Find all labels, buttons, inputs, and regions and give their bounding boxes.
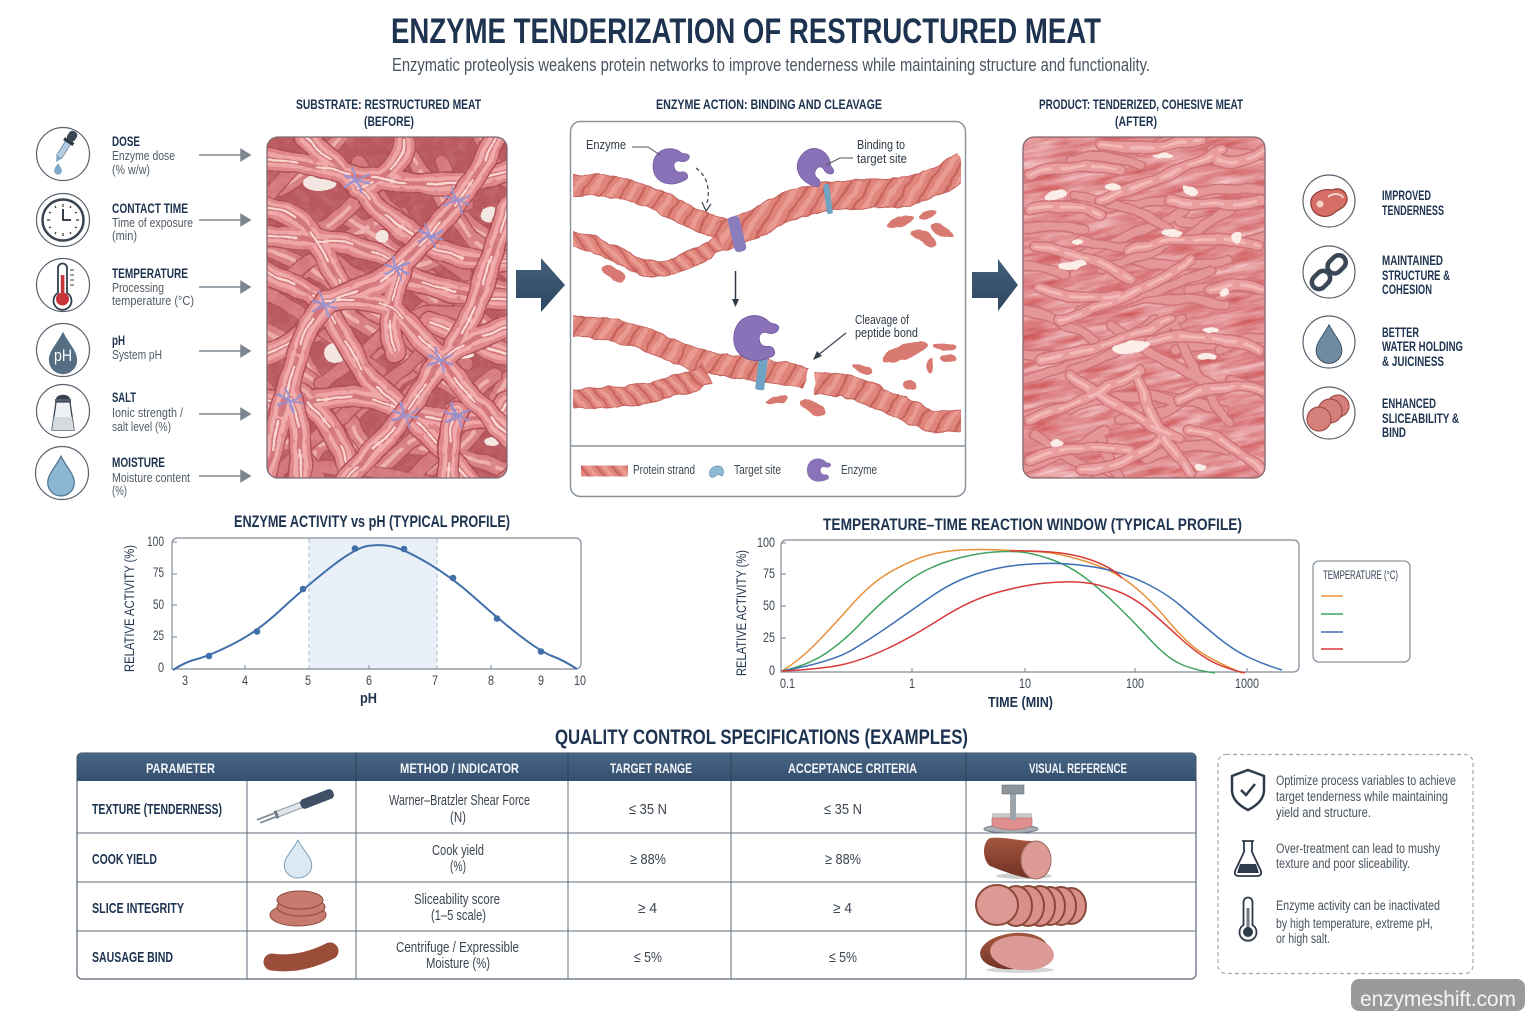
table header <box>77 753 1196 781</box>
y axis labels: 100 <box>147 534 164 549</box>
label: binding to target site <box>826 138 907 166</box>
row: cook yield <box>92 838 1052 879</box>
axis title y: RELATIVE ACTIVITY (%) <box>734 550 749 676</box>
text: sliceability: ENHANCED <box>1382 396 1436 411</box>
text: sliceability <box>1382 396 1459 440</box>
arrow: dashed approach <box>696 168 711 211</box>
row: cook yield: ≥ 88% <box>630 851 666 868</box>
arrow: step down <box>732 271 739 307</box>
panel: tenderized meat after <box>1022 136 1266 479</box>
y axis labels: 0 <box>158 660 164 675</box>
row: slice integrity: ≥ 4 <box>833 900 852 917</box>
heading: substrate <box>296 96 481 129</box>
legend: temperature: TEMPERATURE (°C) <box>1323 570 1398 582</box>
arrow <box>199 282 250 292</box>
icon: water drop <box>1303 316 1355 368</box>
illustration: protein strands <box>560 165 965 421</box>
arrow <box>199 346 250 356</box>
heading: enzyme action: ENZYME ACTION: BINDING AND CLEAVAGE <box>656 96 882 112</box>
text: salt <box>112 389 183 434</box>
x axis labels: 6 <box>366 673 372 688</box>
y axis labels <box>147 534 164 675</box>
note: optimize <box>1276 773 1456 820</box>
arrow: before to action <box>516 258 565 312</box>
text: moisture: (%) <box>112 484 127 498</box>
text: dose <box>112 133 175 177</box>
text: sliceability: BIND <box>1382 425 1406 440</box>
text: water holding: & JUICINESS <box>1382 354 1444 369</box>
y axis labels: 25 <box>153 628 164 643</box>
text: water holding <box>1382 325 1463 369</box>
note: inactivation: Enzyme activity can be inactivated <box>1276 898 1440 913</box>
text: contact time: CONTACT TIME <box>112 200 188 216</box>
text: maintained structure: MAINTAINED <box>1382 253 1443 268</box>
icon: sliced sausage <box>1303 387 1355 439</box>
x axis labels: 1000 <box>1235 676 1259 691</box>
row: cook yield: COOK YIELD <box>92 851 157 868</box>
icon: shear probe <box>256 788 335 826</box>
image: sausage log <box>984 838 1052 879</box>
row: cook yield: ≥ 88% <box>825 851 861 868</box>
note: inactivation <box>1276 898 1440 946</box>
note: optimize: Optimize process variables to achieve <box>1276 773 1456 788</box>
table header: VISUAL REFERENCE <box>1029 760 1127 776</box>
heading: quality control: QUALITY CONTROL SPECIFICATIONS (EXAMPLES) <box>555 726 968 749</box>
arrow <box>199 408 250 420</box>
label: binding to target site: target site <box>857 152 907 166</box>
axis title y: RELATIVE ACTIVITY (%) <box>122 545 137 672</box>
row: sausage bind: SAUSAGE BIND <box>92 949 173 966</box>
icon: pH drop <box>36 324 90 376</box>
row: sausage bind: ≤ 5% <box>634 949 662 966</box>
chart: enzyme activity vs pH <box>122 513 586 707</box>
row: cook yield: (%) <box>450 858 466 875</box>
text: improved tenderness <box>1382 188 1444 218</box>
legend: enzyme: Enzyme <box>841 463 877 477</box>
text: dose: (% w/w) <box>112 163 150 177</box>
icon: clock <box>36 194 90 246</box>
row: texture: ≤ 35 N <box>629 801 667 818</box>
x axis labels: 0.1 <box>780 676 795 691</box>
text: water holding: WATER HOLDING <box>1382 339 1463 354</box>
text: contact time: (min) <box>112 229 137 243</box>
icon: salt shaker <box>36 384 90 438</box>
table header: PARAMETER <box>146 760 215 776</box>
row: slice integrity <box>92 885 1086 926</box>
axis title x: TIME (MIN) <box>988 694 1053 711</box>
curves <box>782 550 1282 673</box>
x axis labels: 5 <box>305 673 311 688</box>
table header: TARGET RANGE <box>610 760 692 776</box>
text: temperature: temperature (°C) <box>112 294 194 308</box>
enzyme: cleavage <box>734 316 779 390</box>
chart: temperature-time window <box>734 515 1410 711</box>
text: maintained structure: COHESION <box>1382 282 1432 297</box>
text: contact time: Time of exposure <box>112 216 193 230</box>
y axis labels: 75 <box>153 565 164 580</box>
text: moisture <box>112 454 190 498</box>
note: over-treatment <box>1276 841 1440 871</box>
row: sausage bind <box>92 930 1055 973</box>
icon: pH drop: pH <box>54 346 72 365</box>
row: texture: TEXTURE (TENDERNESS) <box>92 801 222 818</box>
text: temperature: Processing <box>112 281 164 295</box>
panel: process variables <box>36 128 250 500</box>
watermark <box>1351 979 1525 1011</box>
icon: flask <box>1235 841 1261 876</box>
legend: target site <box>710 463 781 477</box>
icon: thermometer <box>36 258 90 312</box>
heading: product <box>1039 96 1243 129</box>
text: improved tenderness: TENDERNESS <box>1382 203 1444 218</box>
note: inactivation: or high salt. <box>1276 931 1330 946</box>
table: quality control specifications <box>77 753 1196 979</box>
icon: dropper <box>36 128 90 180</box>
row: texture: ≤ 35 N <box>824 801 862 818</box>
table header: ACCEPTANCE CRITERIA <box>788 760 917 776</box>
icon: steak <box>1303 175 1355 227</box>
x axis labels <box>182 673 586 688</box>
text: pH: System pH <box>112 348 162 362</box>
text: pH <box>112 332 162 362</box>
legend: target site: Target site <box>734 463 781 477</box>
line series <box>173 545 577 670</box>
y axis labels: 25 <box>763 630 775 645</box>
row: slice integrity: ≥ 4 <box>638 900 657 917</box>
x axis labels: 3 <box>182 673 188 688</box>
x axis labels: 10 <box>1019 676 1031 691</box>
x axis labels: 10 <box>574 673 586 688</box>
y axis labels: 100 <box>757 535 775 550</box>
legend: protein strand: Protein strand <box>633 463 695 477</box>
panel: notes <box>1218 754 1473 974</box>
x axis labels: 1 <box>909 676 915 691</box>
text: maintained structure <box>1382 253 1450 297</box>
icon: sausage <box>272 951 330 963</box>
panel: enzyme action <box>560 122 966 496</box>
icon: chain link <box>1303 246 1355 298</box>
y axis labels: 50 <box>763 598 775 613</box>
heading: substrate: SUBSTRATE: RESTRUCTURED MEAT <box>296 96 481 112</box>
note: over-treatment: texture and poor sliceability. <box>1276 856 1410 871</box>
note: over-treatment: Over-treatment can lead to mushy <box>1276 841 1440 856</box>
text: dose: Enzyme dose <box>112 149 175 163</box>
chart title: TEMPERATURE–TIME REACTION WINDOW (TYPICAL PROFILE) <box>823 515 1242 534</box>
icon: drop <box>284 840 312 878</box>
y axis labels: 0 <box>769 663 775 678</box>
optimum band <box>309 539 437 669</box>
note: optimize: target tenderness while maintaining <box>1276 789 1448 804</box>
x axis labels: 4 <box>242 673 248 688</box>
label: enzyme: Enzyme <box>586 138 626 152</box>
row: sausage bind: ≤ 5% <box>829 949 857 966</box>
image: sausage chunk <box>978 930 1055 973</box>
text: water holding: BETTER <box>1382 325 1419 340</box>
text: maintained structure: STRUCTURE & <box>1382 268 1450 283</box>
x axis labels: 8 <box>488 673 494 688</box>
icon: moisture drop <box>36 446 88 500</box>
text: temperature: TEMPERATURE <box>112 265 188 281</box>
title: ENZYME TENDERIZATION OF RESTRUCTURED MEAT <box>391 12 1101 51</box>
text: salt: Ionic strength / <box>112 406 183 420</box>
text: contact time <box>112 200 193 243</box>
enzyme: bound at target <box>791 142 839 214</box>
purple band on strand <box>727 215 747 253</box>
text: moisture: Moisture content <box>112 471 190 485</box>
row: sausage bind: Moisture (%) <box>426 955 490 972</box>
image: texture press <box>984 785 1038 833</box>
row: slice integrity: (1–5 scale) <box>431 907 486 924</box>
x axis labels: 100 <box>1126 676 1144 691</box>
y axis labels <box>757 535 775 678</box>
arrow <box>199 470 250 482</box>
label: cleavage of peptide bond <box>813 313 918 360</box>
text: salt: SALT <box>112 389 136 405</box>
note: optimize: yield and structure. <box>1276 805 1371 820</box>
label: cleavage of peptide bond: Cleavage of <box>855 313 909 327</box>
icon: shield <box>1232 770 1264 810</box>
legend: enzyme <box>807 458 877 482</box>
image: sliced sausage <box>976 885 1086 926</box>
y axis labels: 50 <box>153 597 164 612</box>
row: slice integrity: SLICE INTEGRITY <box>92 900 184 917</box>
heading: product: PRODUCT: TENDERIZED, COHESIVE MEAT <box>1039 96 1243 112</box>
axis title x: pH <box>360 690 377 707</box>
table header: METHOD / INDICATOR <box>400 760 519 776</box>
label: binding to target site: Binding to <box>857 138 905 152</box>
label: enzyme <box>586 138 660 155</box>
panel: restructured meat before <box>266 136 508 479</box>
arrow <box>199 150 250 160</box>
arrow <box>199 214 250 226</box>
arrow: action to after <box>972 259 1018 311</box>
row: texture: Warner–Bratzler Shear Force <box>389 792 530 809</box>
panel: benefits <box>1303 175 1463 440</box>
text: temperature <box>112 265 194 308</box>
note: inactivation: by high temperature, extreme pH, <box>1276 916 1433 931</box>
row: sausage bind: Centrifuge / Expressible <box>396 939 519 956</box>
row: texture <box>92 785 1038 833</box>
x axis labels <box>780 676 1259 691</box>
row: texture: (N) <box>450 809 466 826</box>
x axis labels: 7 <box>432 673 438 688</box>
subtitle: Enzymatic proteolysis weakens protein networks to improve tenderness while maintaining structure and functionality. <box>392 55 1150 75</box>
text: salt: salt level (%) <box>112 420 171 434</box>
heading: substrate: (BEFORE) <box>364 113 414 129</box>
row: cook yield: Cook yield <box>432 842 484 859</box>
enzyme: free <box>652 147 692 185</box>
text: sliceability: SLICEABILITY & <box>1382 411 1459 426</box>
text: dose: DOSE <box>112 133 140 149</box>
legend: temperature <box>1313 561 1410 662</box>
chart title: ENZYME ACTIVITY vs pH (TYPICAL PROFILE) <box>234 513 510 531</box>
y axis labels: 75 <box>763 566 775 581</box>
text: improved tenderness: IMPROVED <box>1382 188 1431 203</box>
label: cleavage of peptide bond: peptide bond <box>855 326 918 340</box>
legend: protein strand <box>581 463 695 477</box>
row: slice integrity: Sliceability score <box>414 891 500 908</box>
text: moisture: MOISTURE <box>112 454 165 470</box>
icon: slices stack <box>270 891 326 926</box>
x axis labels: 9 <box>538 673 544 688</box>
text: pH: pH <box>112 332 125 348</box>
watermark: enzymeshift.com <box>1360 988 1516 1011</box>
heading: product: (AFTER) <box>1115 113 1157 129</box>
icon: thermometer <box>1240 898 1256 941</box>
